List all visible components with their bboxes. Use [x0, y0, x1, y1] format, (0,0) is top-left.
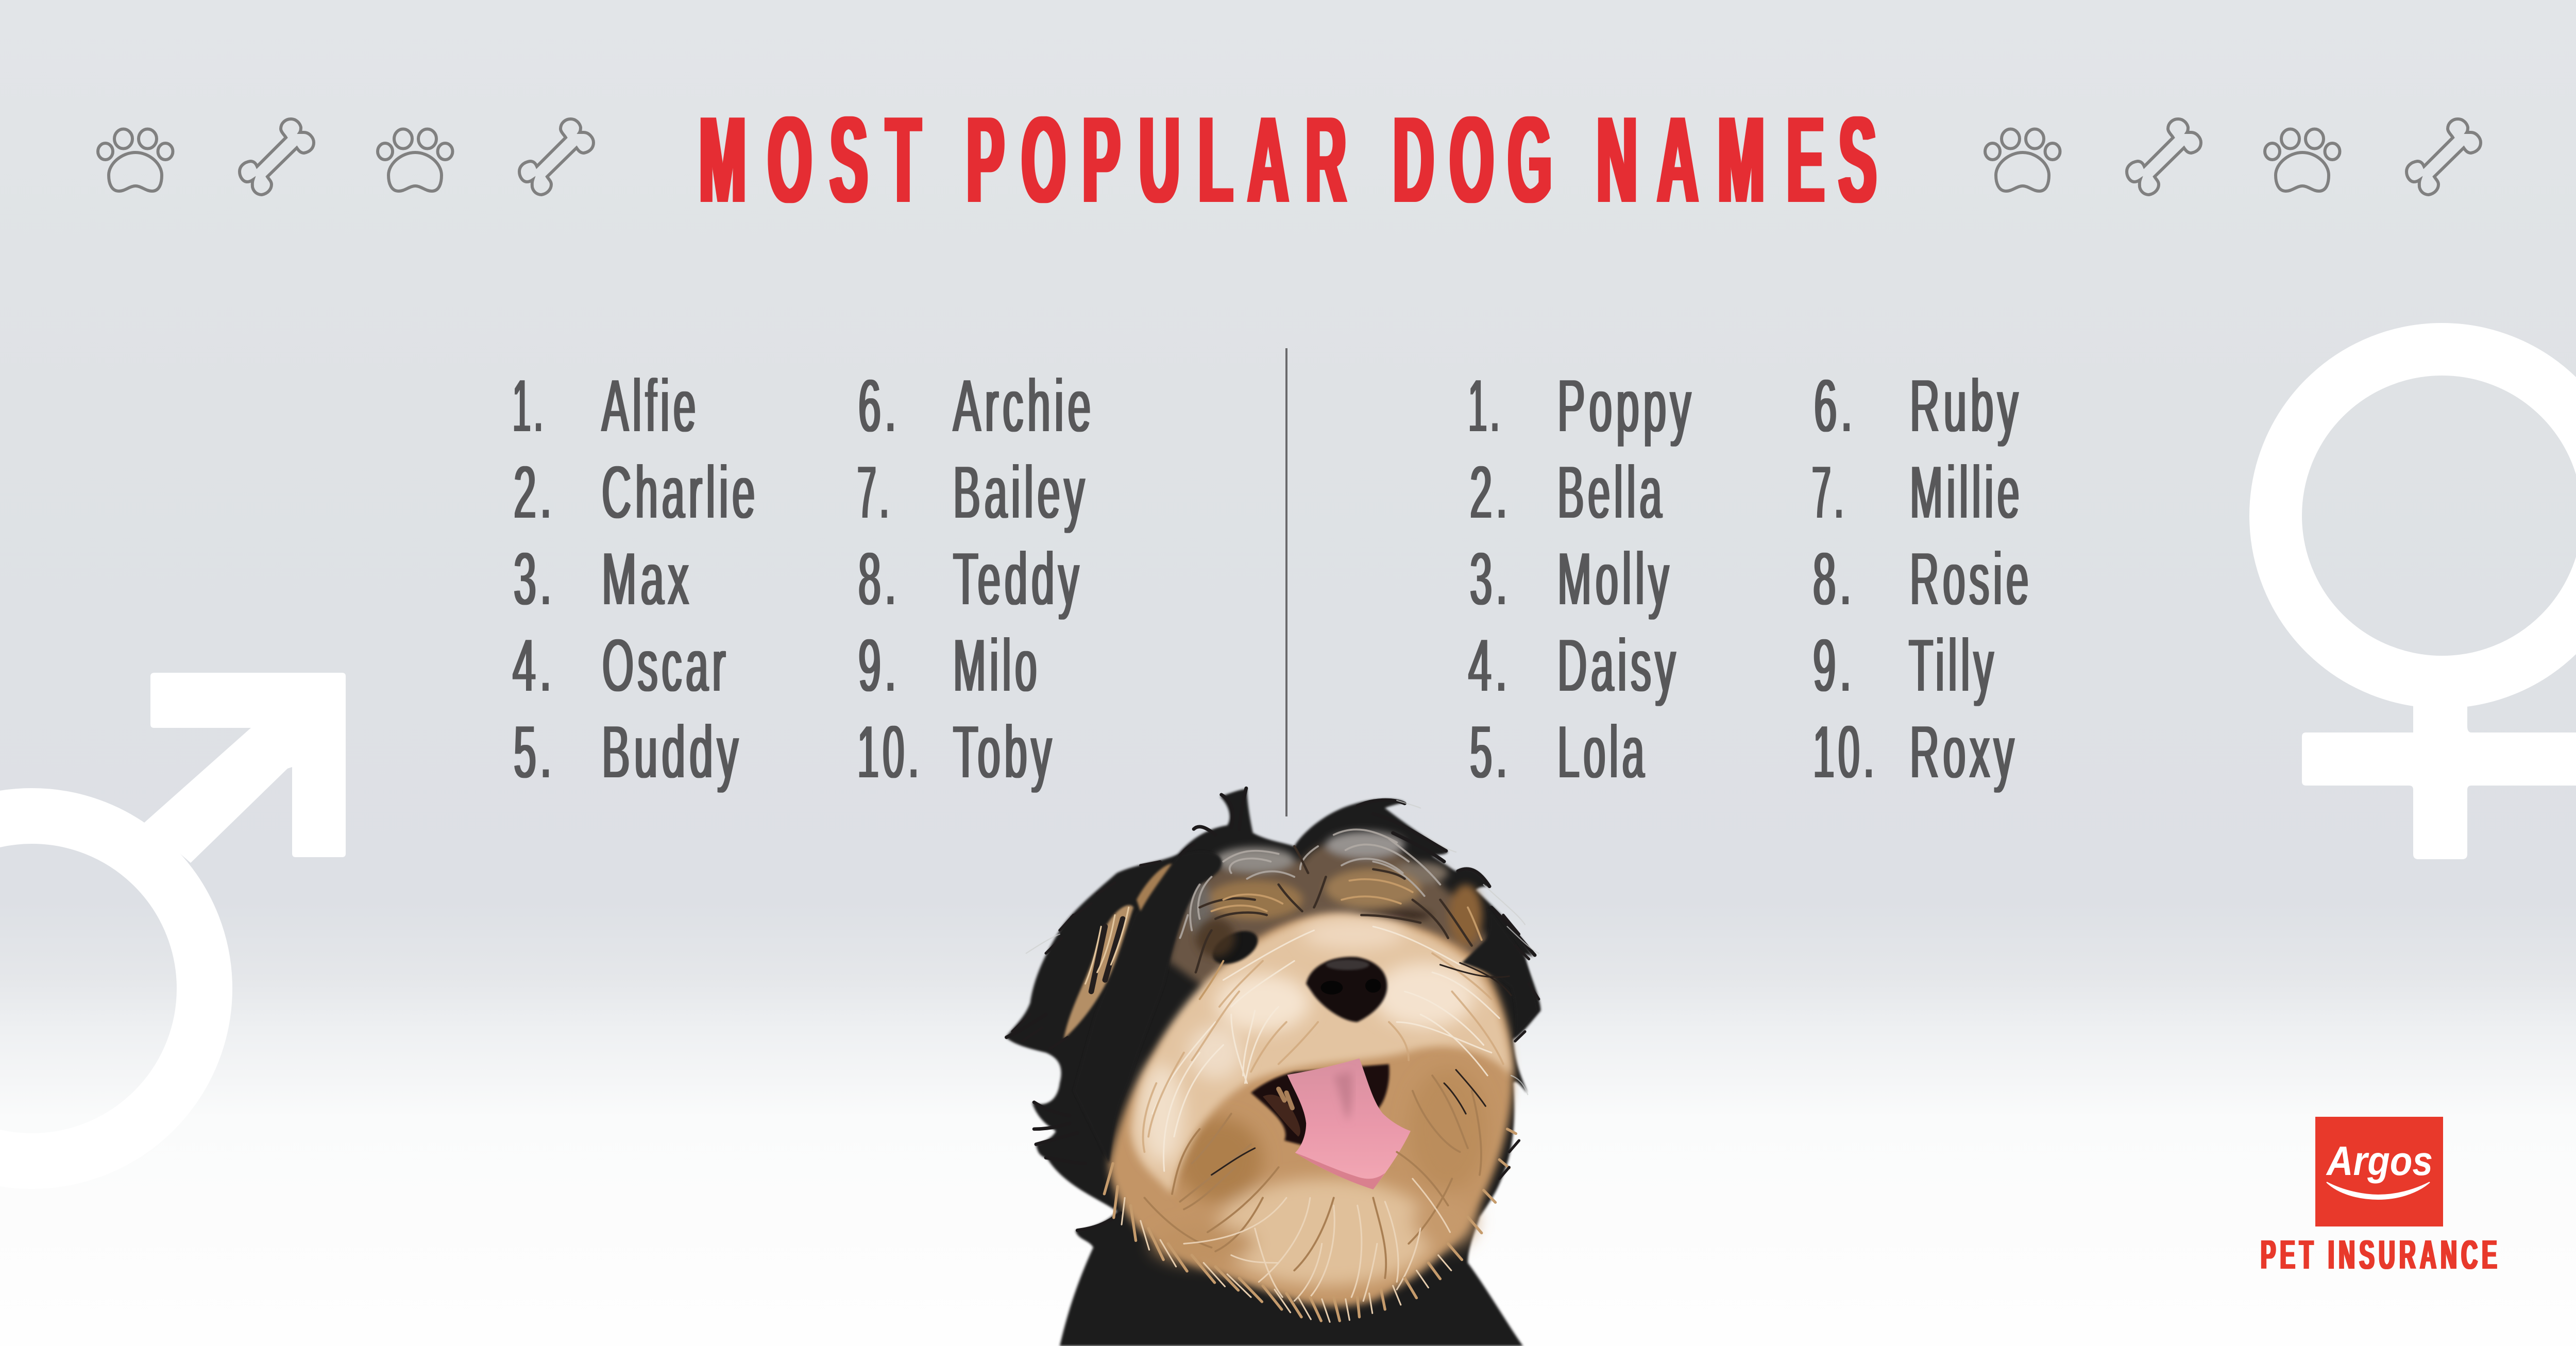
panel: boys names: 5. [514, 711, 555, 793]
dog face fur [1109, 914, 1513, 1306]
panel: girls names: Poppy [1557, 365, 1695, 447]
divider line [1285, 348, 1287, 816]
panel: boys names: Archie [953, 365, 1095, 447]
panel: boys names: 2. [514, 451, 555, 534]
panel: boys names: Teddy [953, 538, 1083, 620]
dog silhouette [1006, 789, 1541, 1346]
panel: boys names: Toby [953, 711, 1056, 793]
panel: boys names: 8. [858, 538, 900, 620]
panel: girls names: 1. [1468, 365, 1503, 447]
panel: girls names: Rosie [1910, 538, 2032, 620]
panel: girls names: Roxy [1910, 711, 2018, 793]
dog muzzle highlights [1141, 919, 1476, 1164]
panel: girls names: 8. [1813, 538, 1855, 620]
logo square [2315, 1117, 2443, 1226]
dog fur strands [1007, 788, 1539, 1322]
panel: girls names: 3. [1470, 538, 1511, 620]
panel: girls names: Lola [1557, 711, 1648, 793]
panel: boys names: 10. [857, 711, 923, 793]
panel: girls names: Molly [1557, 538, 1673, 620]
panel: boys names: 3. [514, 538, 555, 620]
panel: boys names: Charlie [602, 451, 759, 534]
icon: male symbol [0, 673, 346, 1161]
icon: bone [519, 119, 594, 195]
logo caption: PET INSURANCE [2261, 1232, 2497, 1277]
panel: boys names: 7. [857, 451, 892, 534]
icons: right paws and bones [1985, 119, 2481, 195]
icon: female symbol [2276, 349, 2576, 859]
panel: girls names: Ruby [1910, 365, 2022, 447]
title: MOST POPULAR DOG NAMES [699, 91, 1876, 228]
dog nose [1306, 957, 1387, 1022]
dog tongue [1287, 1059, 1411, 1189]
icon: bone [2406, 119, 2481, 195]
icon: paw [378, 129, 452, 191]
dog illustration [1006, 788, 1541, 1346]
panel: boys names: 6. [858, 365, 900, 447]
logo wordmark: Argos [2326, 1138, 2433, 1184]
panel: boys names: Oscar [602, 624, 730, 707]
logo smile [2327, 1182, 2430, 1199]
dog eye [1196, 919, 1263, 971]
panel: boys names: Alfie [602, 365, 700, 447]
panel: girls names: 6. [1814, 365, 1856, 447]
icon: paw [98, 129, 173, 191]
panel: girls names: 5. [1470, 711, 1511, 793]
panel: boys names [513, 365, 1095, 793]
dog mouth [1251, 1064, 1389, 1146]
panel: boys names: 1. [513, 365, 546, 447]
panel: boys names: Bailey [953, 451, 1089, 534]
panel: girls names: Tilly [1909, 624, 1997, 707]
panel: girls names: 9. [1813, 624, 1855, 707]
panel: boys names: Max [602, 538, 693, 620]
panel: girls names [1468, 365, 2032, 793]
icon: bone [240, 119, 314, 195]
dog chin shading [1153, 1068, 1487, 1286]
panel: boys names: 4. [513, 624, 555, 707]
icon: paw [1985, 129, 2060, 191]
dog right ear edge [1462, 908, 1539, 1039]
icons: left paws and bones [98, 119, 594, 195]
panel: girls names: Daisy [1557, 624, 1680, 707]
icon: bone [2127, 119, 2201, 195]
panel: girls names: 7. [1812, 451, 1847, 534]
panel: girls names: 2. [1470, 451, 1511, 534]
panel: boys names: Buddy [602, 711, 742, 793]
panel: girls names: Millie [1910, 451, 2023, 534]
dog muzzle fur [1131, 915, 1511, 1194]
dog forehead fur [1168, 831, 1496, 995]
panel: girls names: Bella [1557, 451, 1666, 534]
dog left ear and dark mane [1064, 851, 1222, 1164]
panel: boys names: Milo [953, 624, 1041, 707]
icon: paw [2265, 129, 2340, 191]
panel: girls names: 4. [1468, 624, 1511, 707]
panel: boys names: 9. [858, 624, 900, 707]
logo: Argos Pet Insurance [2261, 1117, 2497, 1277]
panel: girls names: 10. [1813, 711, 1878, 793]
